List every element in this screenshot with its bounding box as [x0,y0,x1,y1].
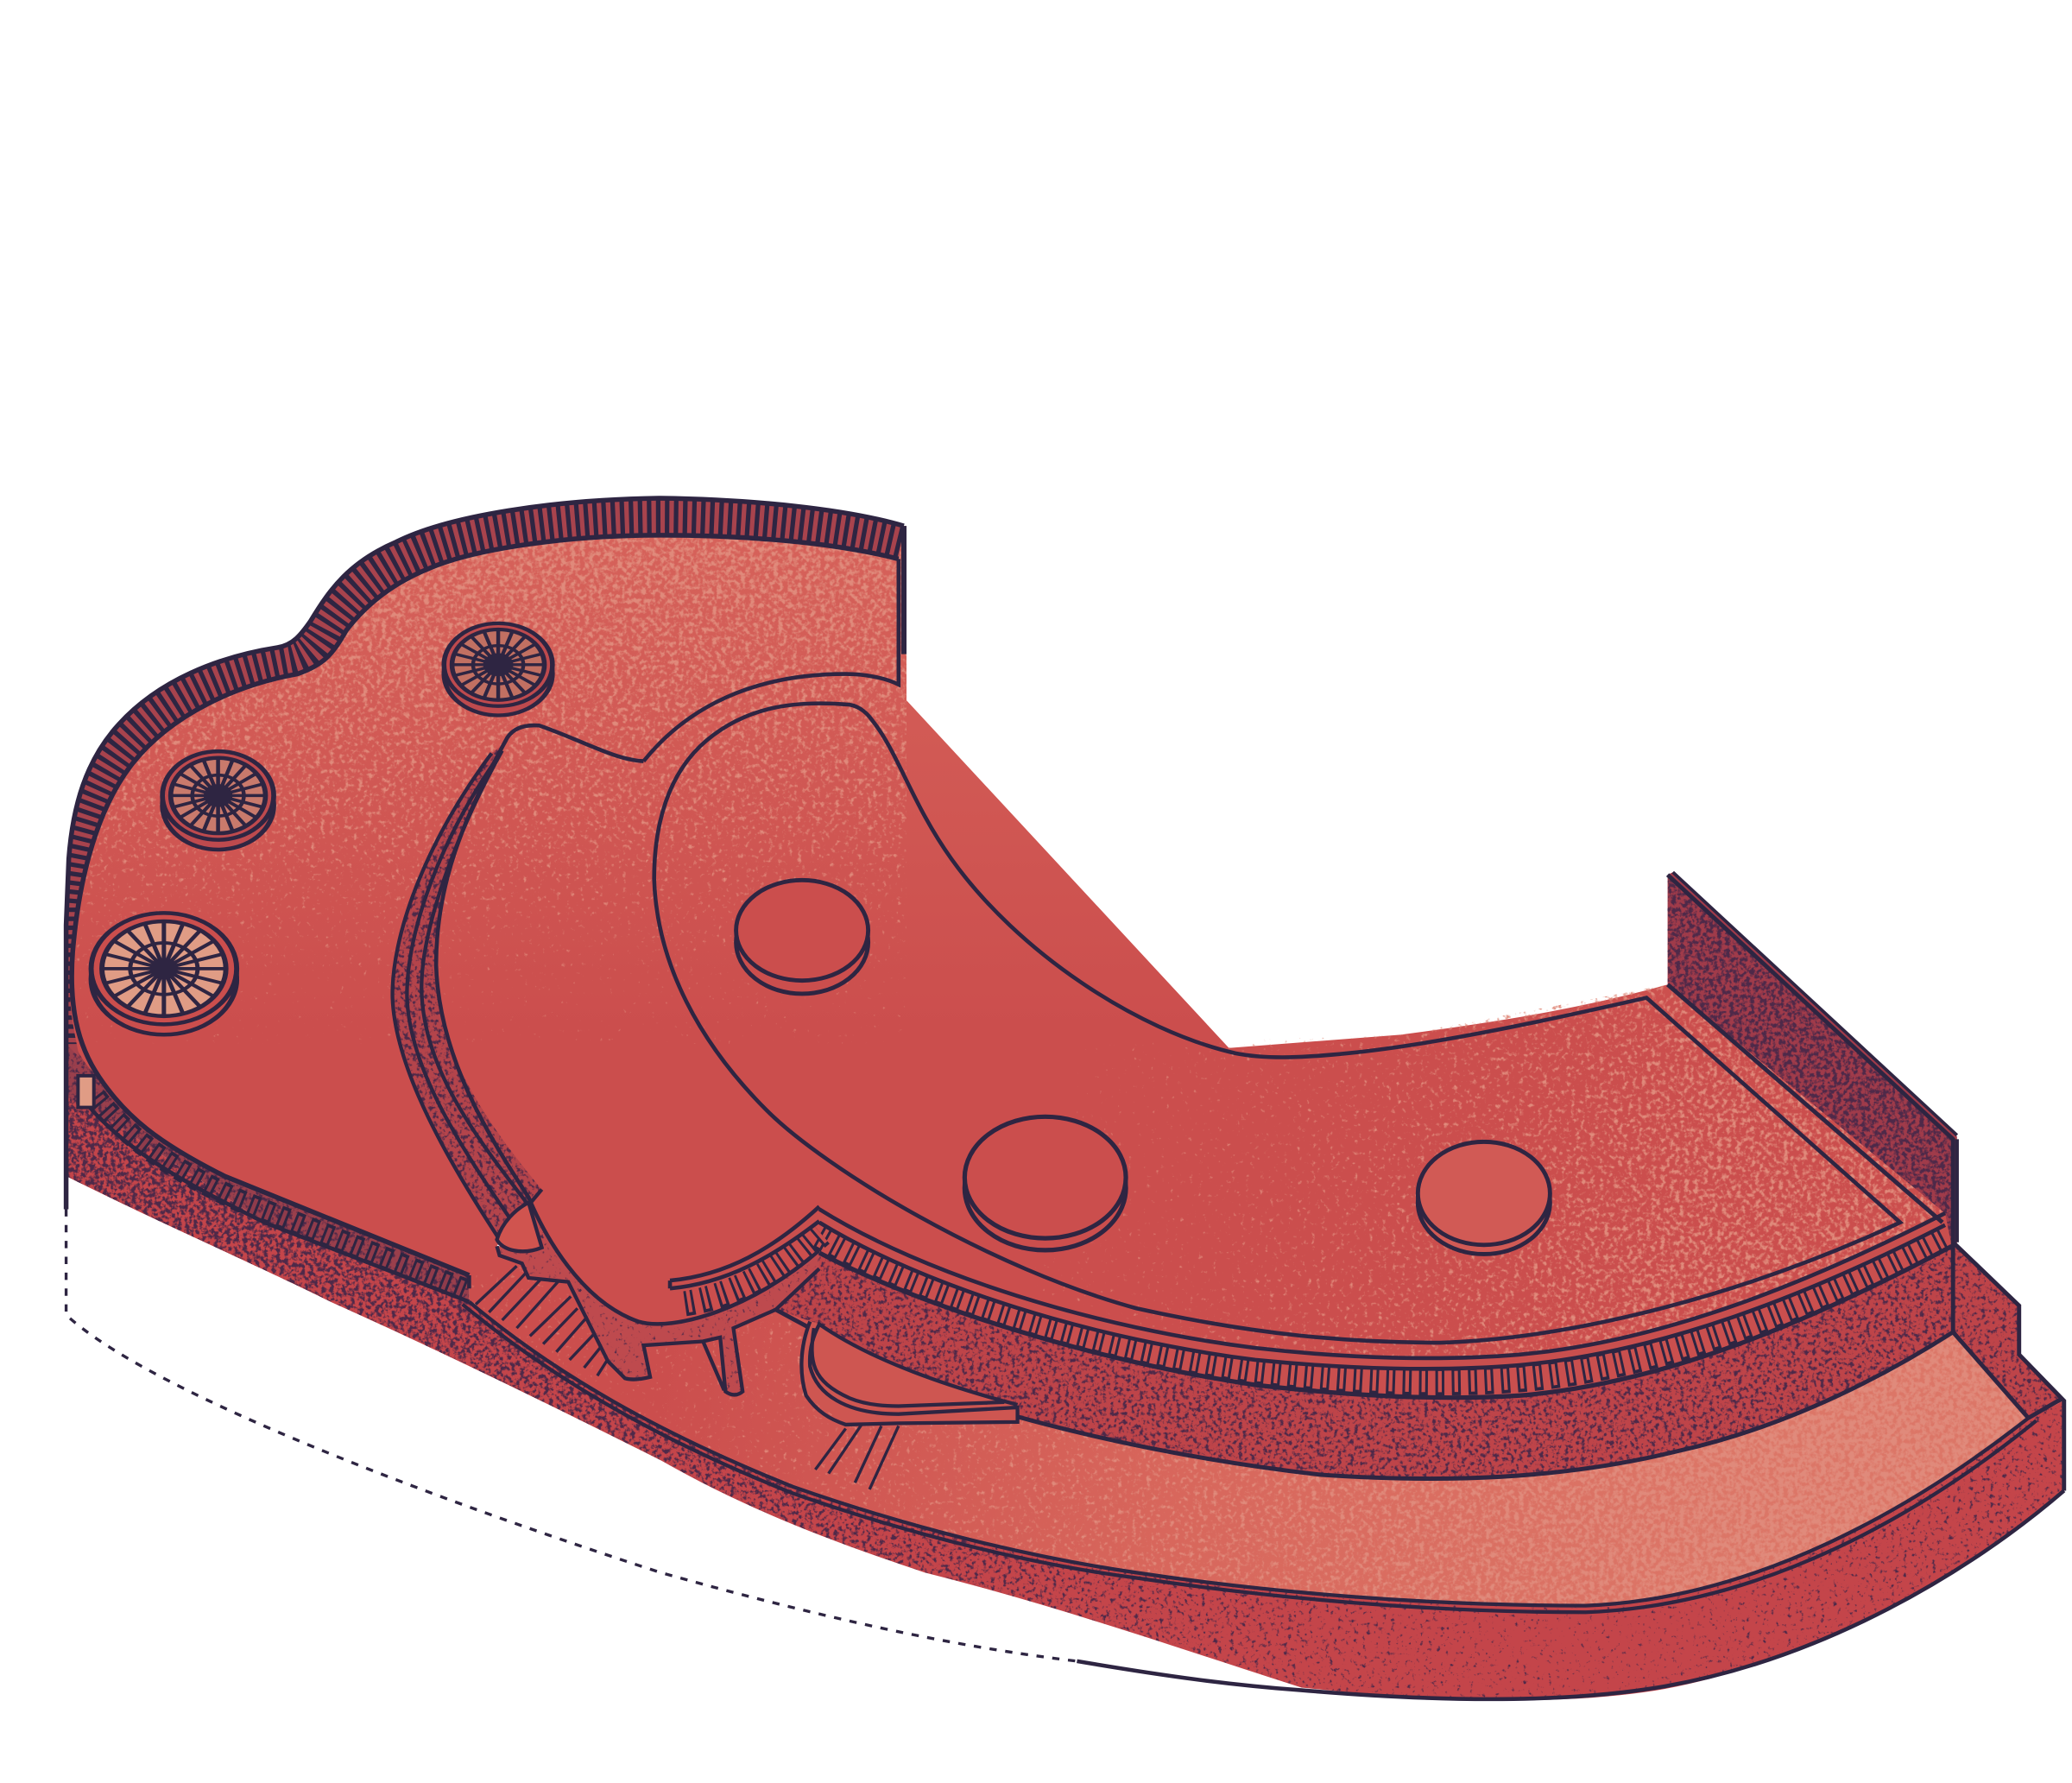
dashed outline of the lost edge [66,1209,1077,1661]
platform top arc and right corner [643,559,899,762]
curved plaza outline [654,704,1900,1343]
top frieze with vertical ribs [66,498,904,1275]
middle retaining wall [775,1246,1952,1479]
illustration: isometric red terrace [64,496,2067,1701]
stepped right wall [1953,1242,2064,1418]
crescent balcony [801,1322,1018,1425]
curved stepped ramp [393,740,542,1251]
upper floor [66,498,1945,1358]
lower terrace floor [469,1242,2028,1606]
round plinth 1 [736,880,869,994]
stair hatching left [476,1266,607,1375]
dark back wall on the right [1668,872,1957,1249]
arched dentil band [670,1206,819,1300]
raised platform outline [436,725,819,1324]
balcony stairs [815,1425,899,1489]
front dentil band [819,1209,1952,1398]
small light doorway on left wall [78,1076,94,1108]
disc: medium skylight [162,751,274,850]
disc: small skylight [444,623,553,715]
front outer wall [66,1031,2064,1700]
left dentil band backing [66,1004,469,1302]
round plinth 3 [1418,1141,1550,1254]
round plinth 2 [964,1116,1126,1250]
disc: large skylight [92,913,237,1034]
foot of the raised platform with legs [497,1198,819,1394]
left dentil band [90,1097,469,1302]
edge lines of lower floor and walls [463,872,2064,1699]
